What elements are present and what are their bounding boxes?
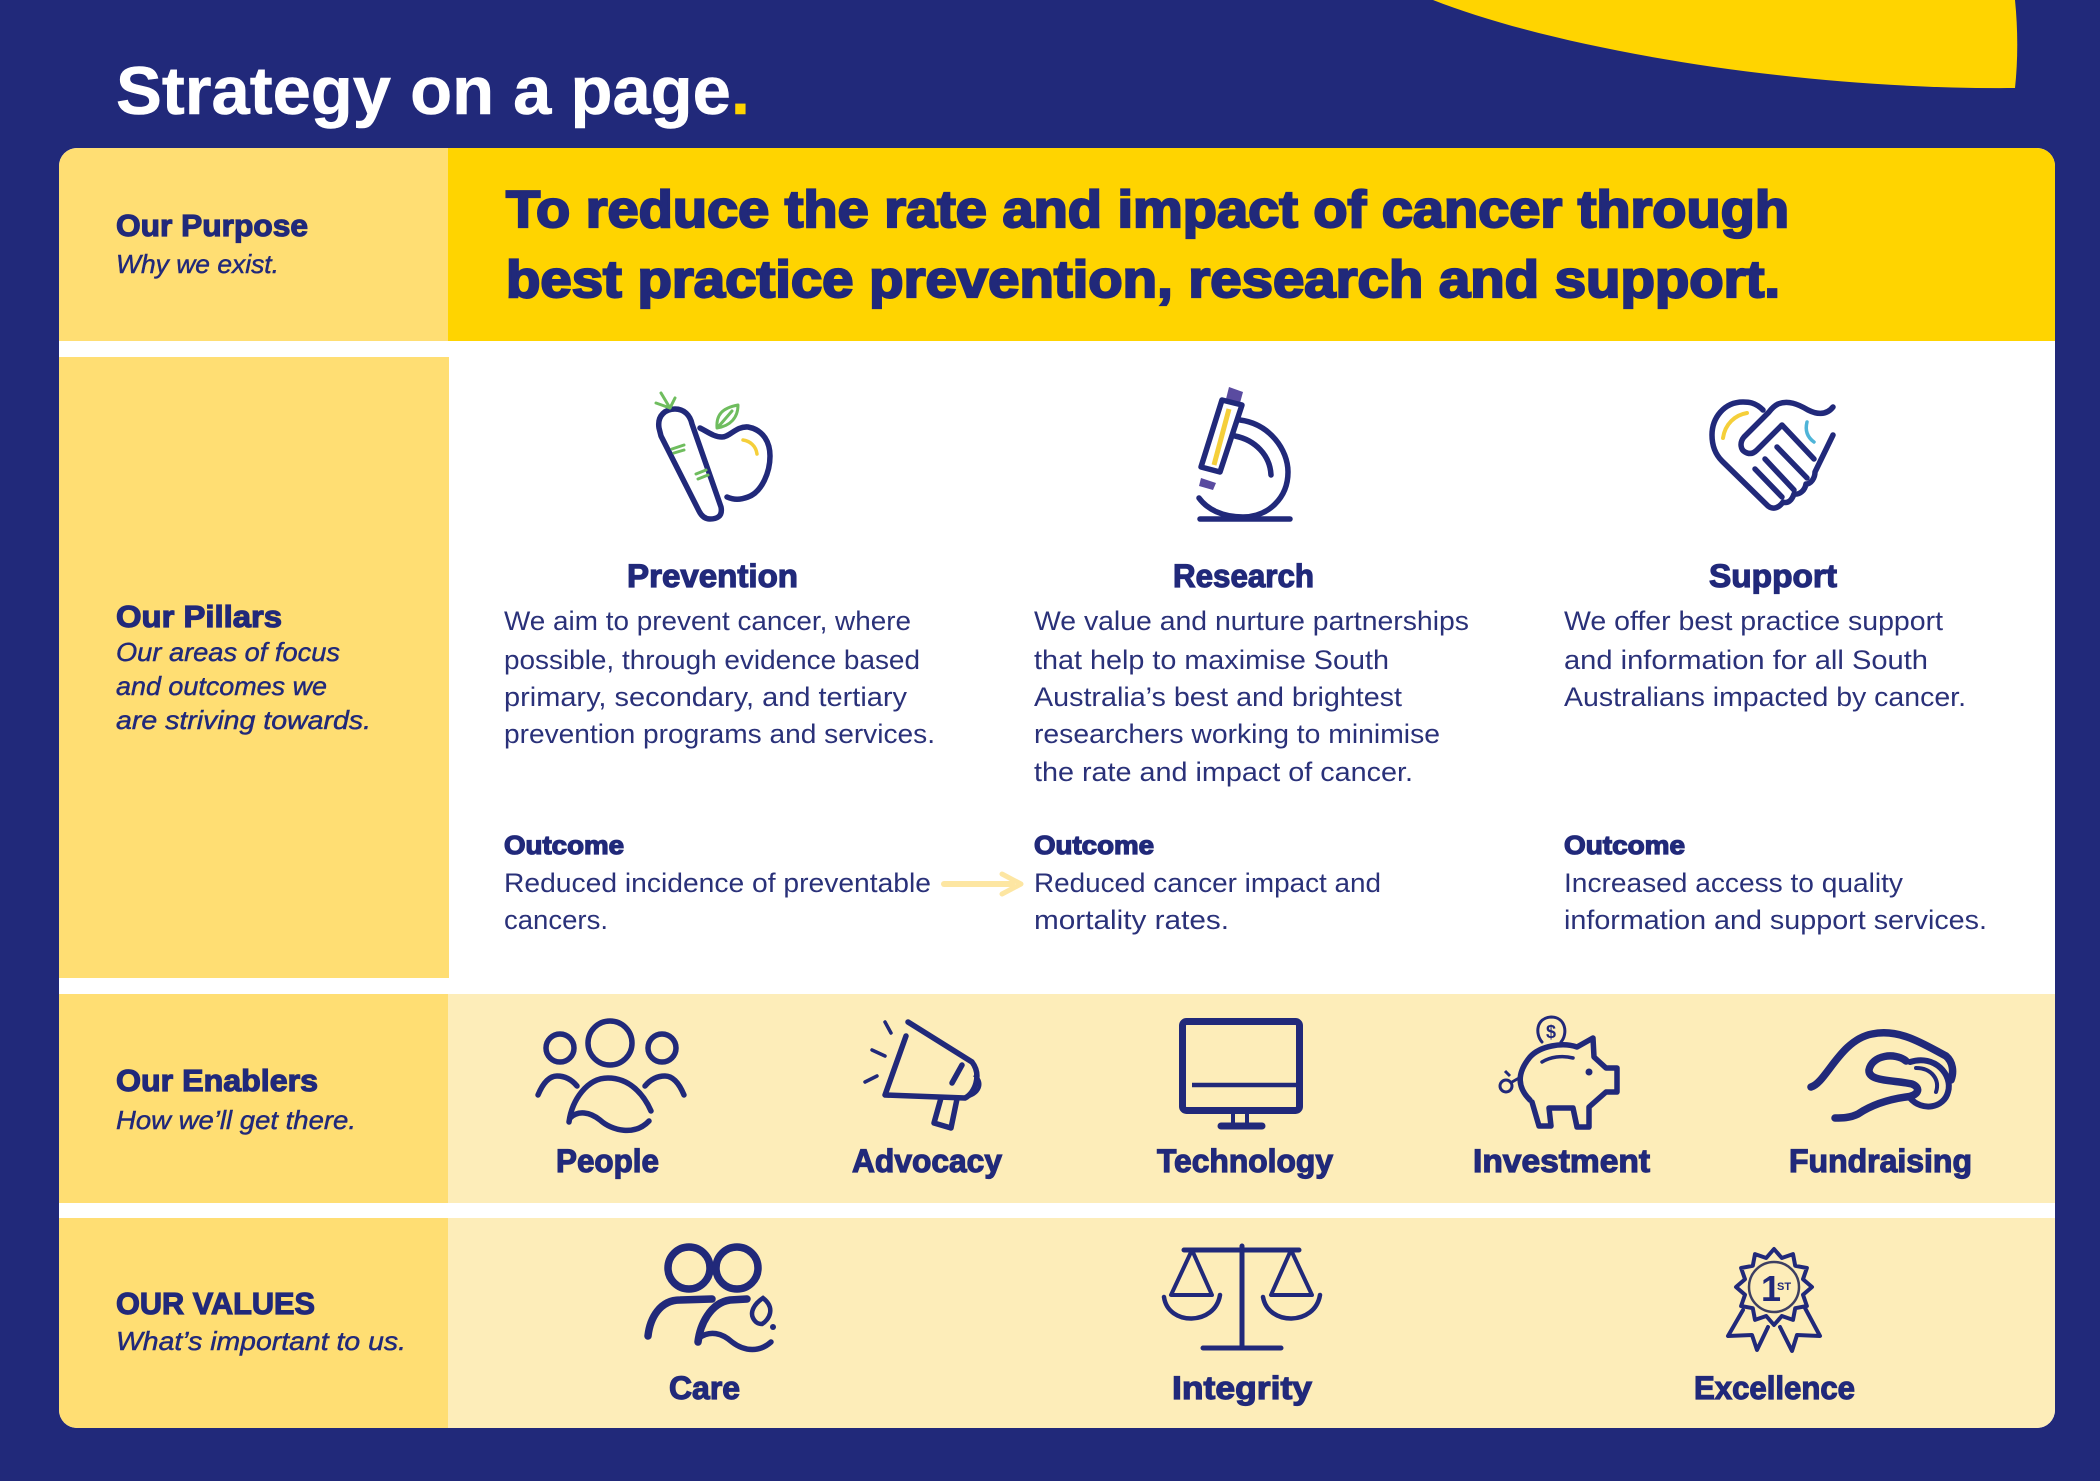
outcome: information and support services.	[1564, 905, 1987, 935]
enabler: investment	[1473, 1017, 1650, 1179]
pillars label: and outcomes we	[116, 671, 327, 701]
outcome: Outcome	[1034, 830, 1154, 860]
heading: Support	[1709, 558, 1837, 594]
enabler: people	[538, 1021, 684, 1179]
description: Australia’s best and brightest	[1034, 682, 1403, 712]
description: We offer best practice support	[1564, 606, 1944, 636]
purpose statement: best practice prevention, research and support.	[506, 251, 1780, 309]
icon: carrot and apple	[656, 393, 770, 519]
icon: piggy bank: $	[1546, 1022, 1556, 1042]
description: We value and nurture partnerships	[1034, 606, 1469, 636]
icon: people	[538, 1021, 684, 1130]
icon: hand holding coin	[1811, 1033, 1953, 1118]
label: People	[556, 1143, 659, 1179]
purpose statement: To reduce the rate and impact of cancer through	[506, 181, 1789, 239]
purpose label	[116, 208, 308, 279]
icon: megaphone	[865, 1022, 980, 1128]
icon: microscope	[1199, 387, 1290, 519]
icon: computer monitor	[1182, 1022, 1300, 1126]
description: We aim to prevent cancer, where	[504, 606, 911, 636]
row: our values	[59, 1218, 2055, 1428]
outcome: mortality rates.	[1034, 905, 1229, 935]
row: our enablers	[59, 994, 2055, 1203]
description: that help to maximise South	[1034, 645, 1389, 675]
description: prevention programs and services.	[504, 719, 935, 749]
enablers label: How we’ll get there.	[116, 1105, 356, 1135]
enablers label	[116, 1063, 356, 1135]
description: the rate and impact of cancer.	[1034, 757, 1413, 787]
icon: balance scales	[1164, 1246, 1320, 1348]
pillar: research	[1034, 387, 1469, 935]
purpose label: Why we exist.	[116, 249, 279, 279]
label: Care	[669, 1370, 740, 1406]
outcome	[1564, 830, 1987, 935]
row: our pillars	[59, 357, 1987, 978]
pillars label: are striving towards.	[116, 705, 371, 735]
icon: first-place ribbon: 1	[1761, 1268, 1781, 1309]
description: Australians impacted by cancer.	[1564, 682, 1966, 712]
pillars label: Our areas of focus	[116, 637, 340, 667]
row: our purpose	[59, 148, 2055, 341]
icon: first-place ribbon	[1728, 1249, 1820, 1351]
description	[1034, 606, 1469, 787]
pillars label: Our Pillars	[116, 599, 282, 634]
enablers label: Our Enablers	[116, 1063, 318, 1098]
enabler: fundraising	[1789, 1033, 1972, 1179]
enabler: advocacy	[852, 1022, 1002, 1179]
pillars label	[116, 599, 371, 735]
values label: OUR VALUES	[116, 1286, 315, 1321]
icon: handshake heart	[1712, 402, 1833, 508]
label: Excellence	[1694, 1370, 1855, 1406]
label: Integrity	[1172, 1370, 1312, 1406]
purpose label: Our Purpose	[116, 208, 308, 243]
decorative yellow arc	[1433, 0, 2017, 88]
pillar: support	[1564, 402, 1987, 935]
title: Strategy on a page.	[116, 53, 750, 129]
heading: Research	[1173, 558, 1314, 594]
icon: caring people	[648, 1247, 776, 1350]
outcome: cancers.	[504, 905, 608, 935]
label: Technology	[1157, 1143, 1333, 1179]
icon: first-place ribbon: ST	[1777, 1281, 1791, 1293]
arrow: prevention to research outcome	[944, 874, 1021, 894]
label: Investment	[1473, 1143, 1650, 1179]
purpose statement	[506, 181, 1789, 309]
description: primary, secondary, and tertiary	[504, 682, 908, 712]
icon: piggy bank	[1500, 1017, 1617, 1127]
description: possible, through evidence based	[504, 645, 920, 675]
outcome: Increased access to quality	[1564, 868, 1904, 898]
value: excellence	[1694, 1249, 1855, 1406]
value: care	[648, 1247, 776, 1406]
outcome: Outcome	[504, 830, 624, 860]
outcome: Reduced cancer impact and	[1034, 868, 1381, 898]
description: researchers working to minimise	[1034, 719, 1440, 749]
enabler: technology	[1157, 1022, 1333, 1179]
pillar: prevention	[504, 393, 935, 935]
description	[504, 606, 935, 749]
outcome: Outcome	[1564, 830, 1685, 860]
heading: Prevention	[627, 558, 798, 594]
description: and information for all South	[1564, 645, 1928, 675]
outcome: Reduced incidence of preventable	[504, 868, 931, 898]
label: Advocacy	[852, 1143, 1002, 1179]
value: integrity	[1164, 1246, 1320, 1406]
values label	[116, 1286, 406, 1356]
description	[1564, 606, 1966, 712]
label: Fundraising	[1789, 1143, 1972, 1179]
values label: What’s important to us.	[116, 1326, 406, 1356]
outcome	[1034, 830, 1381, 935]
outcome	[504, 835, 930, 930]
